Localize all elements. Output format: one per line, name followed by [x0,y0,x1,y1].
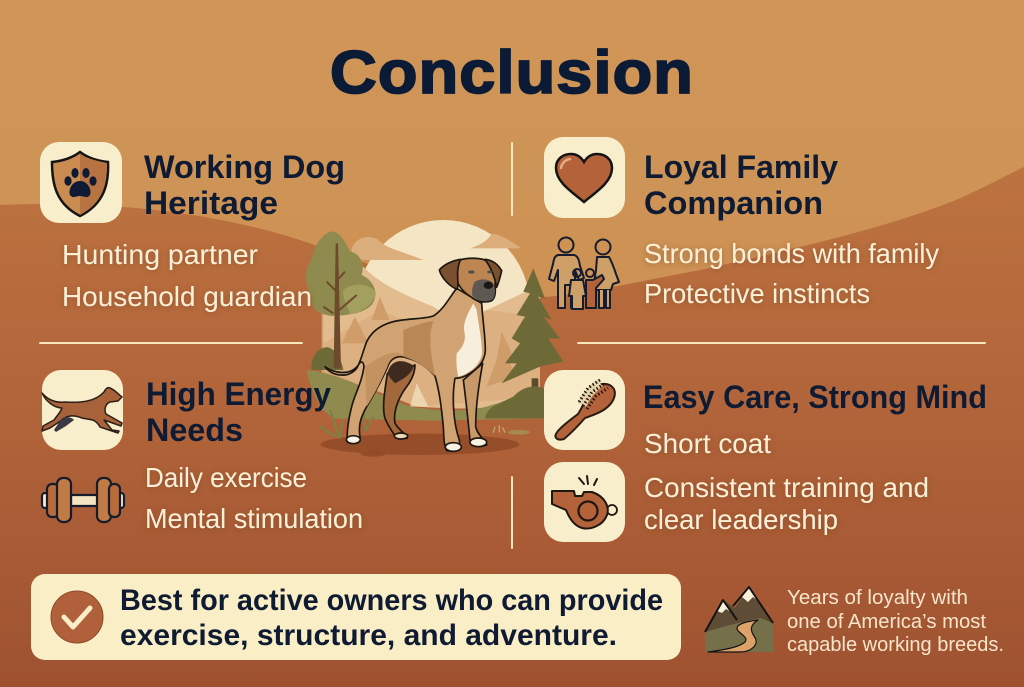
paws [346,436,360,444]
illustration: dog in landscape [306,220,563,457]
list: Consistent training and [644,472,929,503]
far front leg [463,363,487,446]
heading: Companion [644,185,823,221]
heading: Heritage [144,185,278,221]
list: Daily exercise [145,462,307,493]
list: clear leadership [644,504,838,535]
heading: Easy Care, Strong Mind [643,379,987,415]
icon: shield with paw [40,142,122,223]
callout: best for active owners: exercise, structure, and adventure. [120,619,617,652]
sun and hills scene [307,220,548,421]
divider lines [40,143,985,548]
panel: loyal family companion [544,137,939,309]
list item: Short coat [644,428,771,459]
icon: whistle [544,462,625,542]
icon: brush [544,370,625,450]
title: Conclusion [330,39,693,106]
icon: mountains [705,587,773,652]
text block: years of loyalty: capable working breeds. [787,634,1004,656]
head [456,258,495,302]
list: Household guardian [62,281,312,312]
tree: leafy [306,231,376,370]
panel: working dog heritage [40,142,345,312]
dog [325,258,502,451]
heading: Loyal Family [644,149,838,185]
icon: running dog [42,370,123,450]
text block: years of loyalty: Years of loyalty with [787,587,968,609]
panel: high energy needs [42,370,363,534]
icon: heart [544,137,625,218]
panel: easy care, strong mind [544,370,987,542]
icon: family [549,238,619,309]
heading: Working Dog [144,149,345,185]
white chest [456,303,482,377]
heading: High Energy [146,376,331,412]
callout: best for active owners: Best for active owners who can provide [120,584,663,617]
icon: dumbbell [42,478,124,522]
far hind leg [384,365,415,438]
heading: Needs [146,412,243,448]
icon: check badge [51,591,103,643]
list: Protective instincts [644,278,870,309]
list: Strong bonds with family [644,238,939,269]
ground shadow and grass [320,410,530,457]
tree: pine [485,268,563,418]
list: Mental stimulation [145,503,363,534]
callout: best for active owners [31,574,681,660]
text block: years of loyalty: one of America’s most [787,611,986,633]
body and near legs [325,288,485,451]
list: Hunting partner [62,239,258,270]
